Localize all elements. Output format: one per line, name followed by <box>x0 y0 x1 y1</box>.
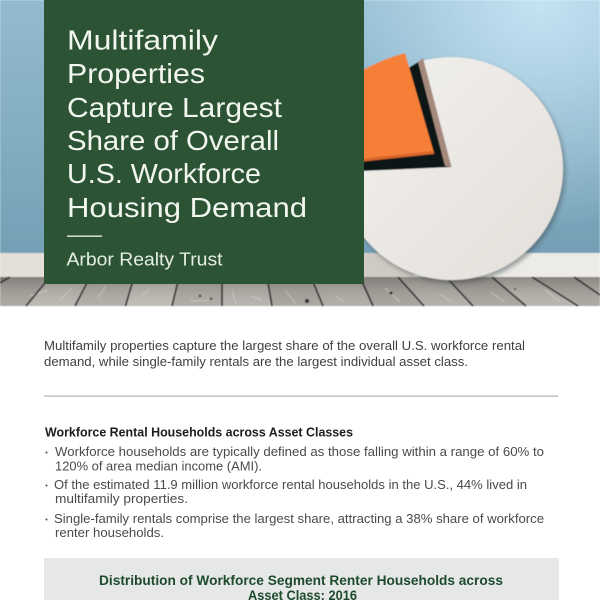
bullet 1 <box>46 444 544 474</box>
title: U.S. Workforce <box>67 158 261 189</box>
hero photo: pie chart leaning on wall <box>0 0 600 306</box>
panel: title block <box>44 0 364 284</box>
title: Share of Overall <box>67 125 279 156</box>
bullet 1: Workforce households are typically defined as those falling within a range of 60% to <box>55 444 544 459</box>
floor planks <box>0 277 600 306</box>
bullet 3 <box>46 511 544 540</box>
bullet 3: Single-family rentals comprise the largest share, attracting a 38% share of workforce <box>54 511 544 526</box>
panel: chart heading box <box>44 558 559 600</box>
bullet 3: renter households. <box>55 525 164 540</box>
source name: Arbor Realty Trust <box>66 250 223 270</box>
icon: white pie slice <box>340 57 563 280</box>
title: Properties <box>67 58 205 89</box>
intro paragraph <box>44 338 525 369</box>
bullet 2 <box>46 477 527 506</box>
bullet 2: Of the estimated 11.9 million workforce rental households in the U.S., 44% lived in <box>54 477 527 492</box>
icon: pie notch <box>340 58 452 172</box>
chart title: Distribution of Workforce Segment Renter Households across <box>99 573 503 588</box>
chart title <box>99 573 503 600</box>
icon: orange pie slice <box>340 53 434 163</box>
title: Capture Largest <box>67 92 282 123</box>
title <box>67 24 307 223</box>
section heading: Workforce Rental Households across Asset Classes <box>45 424 353 440</box>
intro paragraph: Multifamily properties capture the largest share of the overall U.S. workforce rental <box>44 338 525 353</box>
bullet 2: multifamily properties. <box>55 491 188 506</box>
title: Multifamily <box>67 24 218 56</box>
bullet list <box>46 444 544 540</box>
title: Housing Demand <box>67 192 307 223</box>
bullet 1: 120% of area median income (AMI). <box>55 458 262 474</box>
intro paragraph: demand, while single-family rentals are the largest individual asset class. <box>44 354 468 369</box>
